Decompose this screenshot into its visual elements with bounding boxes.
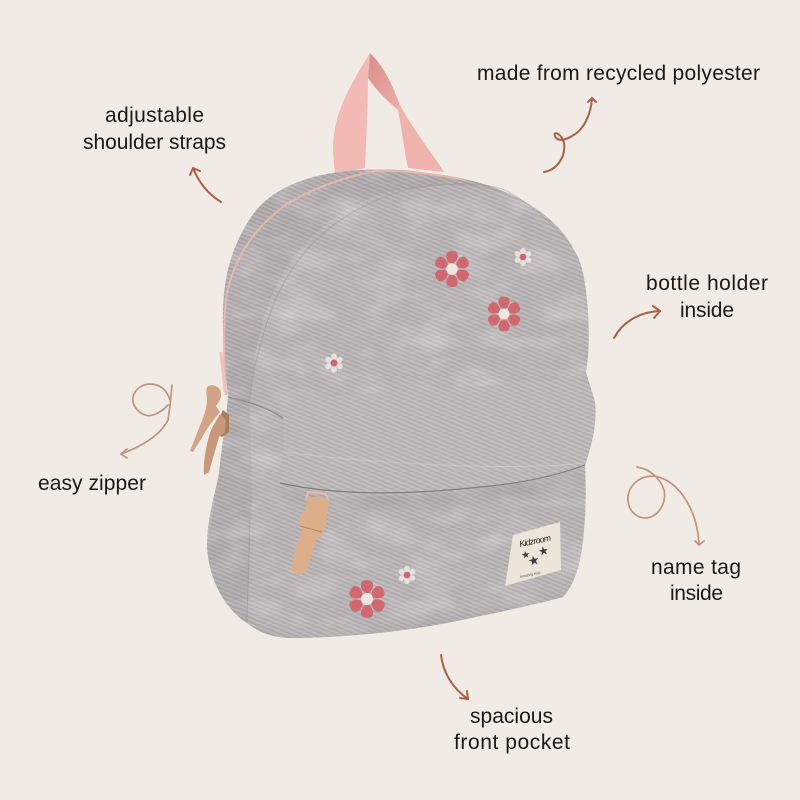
label: adjustable shoulder straps: adjustable <box>105 104 204 127</box>
mottled shading <box>200 160 600 650</box>
label: name tag inside: inside <box>670 582 723 605</box>
front pocket <box>228 377 595 496</box>
arrow: shoulder straps <box>190 168 221 202</box>
label: bottle holder inside <box>646 272 768 322</box>
backpack illustration <box>190 53 600 660</box>
flower 1 <box>433 251 471 287</box>
front pocket shadow <box>280 468 590 506</box>
brand label: ★ <box>520 549 531 562</box>
lower shade <box>274 602 540 638</box>
label: spacious front pocket: front pocket <box>454 731 570 754</box>
seam <box>250 184 572 400</box>
flower 6 <box>398 566 416 584</box>
label: name tag inside: name tag <box>651 556 741 579</box>
arrow: front pocket <box>441 655 468 699</box>
flowers <box>324 248 532 618</box>
label: adjustable shoulder straps: shoulder straps <box>83 131 226 154</box>
brand label: ★ <box>537 543 550 559</box>
label: made from recycled polyester: made from recycled polyester <box>477 62 760 85</box>
main zipper <box>224 171 465 395</box>
side gusset <box>207 170 512 622</box>
twill texture <box>200 160 600 650</box>
label: spacious front pocket <box>454 705 570 754</box>
infographic canvas <box>38 53 768 754</box>
arrow: name tag <box>628 467 704 545</box>
label: bottle holder inside: bottle holder <box>646 272 768 295</box>
flower 2 <box>486 297 522 331</box>
arrow: recycled polyester <box>544 98 596 172</box>
flower 3 <box>514 248 532 266</box>
brand label: Amazing Kidz <box>519 571 541 579</box>
brand label <box>505 522 561 586</box>
backpack body <box>200 160 600 660</box>
label: easy zipper: easy zipper <box>38 472 146 495</box>
flower 4 <box>324 353 344 373</box>
label: adjustable shoulder straps <box>83 104 226 154</box>
light mottling <box>200 160 600 650</box>
label: spacious front pocket: spacious <box>470 705 553 728</box>
front zipper pull <box>291 492 329 575</box>
flower 5 <box>348 580 386 618</box>
label: name tag inside <box>651 556 741 605</box>
brand label: Kidzroom <box>518 533 552 549</box>
arrow: bottle holder <box>614 306 660 338</box>
brand label: ★ <box>527 552 541 569</box>
arrow: easy zipper <box>121 384 172 458</box>
top handle <box>333 53 444 173</box>
side zipper pulls <box>190 352 229 475</box>
label: bottle holder inside: inside <box>680 299 734 322</box>
